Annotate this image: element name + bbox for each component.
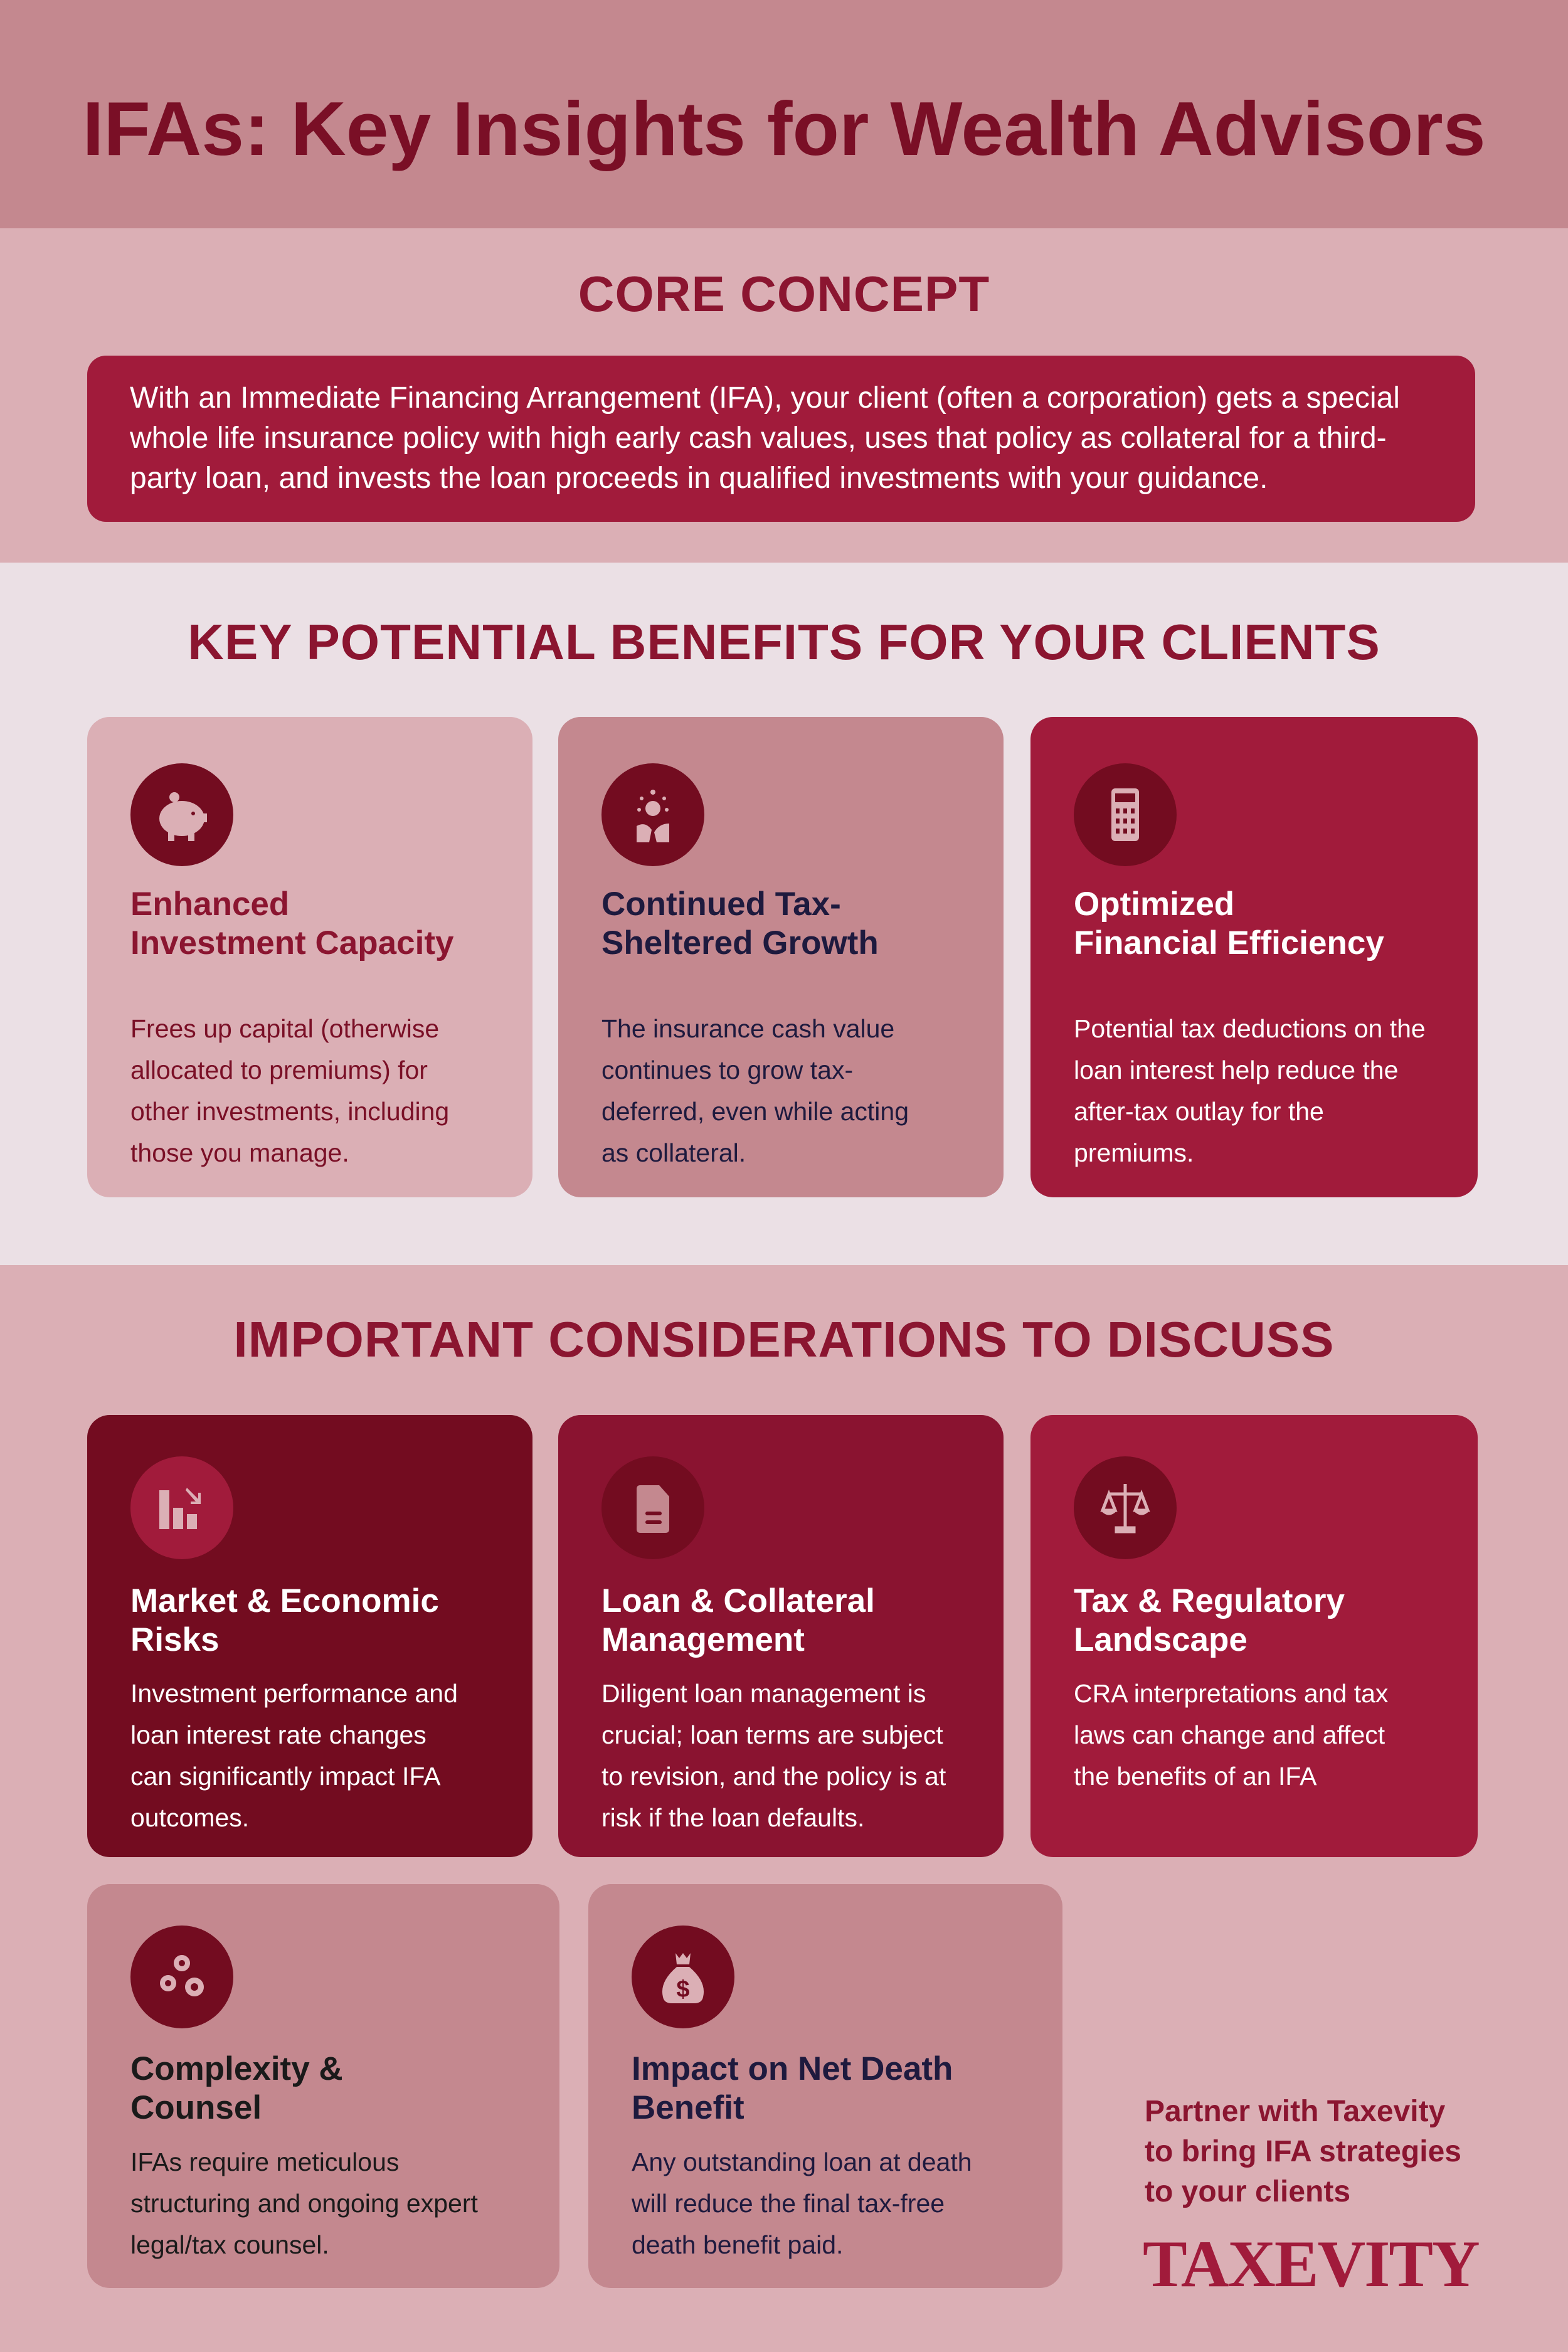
- title: [632, 2050, 953, 2126]
- body: [601, 1679, 946, 1832]
- body: other investments, including: [130, 1097, 449, 1126]
- title: Complexity &: [130, 2050, 343, 2087]
- core concept box: party loan, and invests the loan proceeds in qualified investments with your guidance.: [130, 462, 1268, 495]
- core concept box: With an Immediate Financing Arrangement (IFA), your client (often a corporation) gets a special: [130, 381, 1400, 415]
- heading: core concept: CORE CONCEPT: [578, 266, 990, 322]
- title: Impact on Net Death: [632, 2050, 953, 2087]
- section: core concept: [0, 228, 1568, 563]
- body: [130, 2148, 478, 2259]
- body: deferred, even while acting: [601, 1097, 909, 1126]
- callout: partner text: Partner with Taxevity: [1145, 2095, 1445, 2128]
- header band: [0, 0, 1568, 228]
- title: [601, 1582, 875, 1658]
- title: Investment Capacity: [130, 924, 453, 961]
- title: Counsel: [130, 2089, 262, 2126]
- body: after-tax outlay for the: [1074, 1097, 1324, 1126]
- body: those you manage.: [130, 1138, 349, 1167]
- callout: partner text: to bring IFA strategies: [1145, 2135, 1461, 2168]
- body: [130, 1014, 449, 1167]
- icon: scales: [1074, 1456, 1177, 1559]
- icon: gears: [130, 1926, 233, 2028]
- icon: calculator: [1074, 763, 1177, 866]
- body: CRA interpretations and tax: [1074, 1679, 1388, 1708]
- title: [130, 1582, 439, 1658]
- card: loan management: [558, 1415, 1004, 1857]
- body: can significantly impact IFA: [130, 1762, 440, 1791]
- body: death benefit paid.: [632, 2230, 843, 2259]
- body: laws can change and affect: [1074, 1720, 1385, 1749]
- body: [130, 1679, 458, 1832]
- heading: benefits: KEY POTENTIAL BENEFITS FOR YOUR CLIENTS: [188, 614, 1380, 670]
- body: legal/tax counsel.: [130, 2230, 329, 2259]
- body: [1074, 1014, 1426, 1167]
- title: Benefit: [632, 2089, 744, 2126]
- icon: growth plant: [601, 763, 704, 866]
- body: to revision, and the policy is at: [601, 1762, 946, 1791]
- title: Market & Economic: [130, 1582, 439, 1619]
- body: Investment performance and: [130, 1679, 458, 1708]
- title: IFAs: Key Insights for Wealth Advisors: [82, 86, 1486, 171]
- title: Management: [601, 1621, 805, 1658]
- icon: falling chart: [130, 1456, 233, 1559]
- icon: document: [601, 1456, 704, 1559]
- title: Enhanced: [130, 886, 289, 923]
- body: loan interest rate changes: [130, 1720, 426, 1749]
- body: as collateral.: [601, 1138, 746, 1167]
- title: Risks: [130, 1621, 219, 1658]
- card: enhanced investment capacity: [87, 717, 532, 1197]
- body: [601, 1014, 909, 1167]
- title: Financial Efficiency: [1074, 924, 1384, 961]
- core concept box: whole life insurance policy with high early cash values, uses that policy as collateral for a third-: [130, 421, 1387, 455]
- title: [130, 886, 454, 961]
- icon: money bag: $: [676, 1976, 690, 2003]
- body: allocated to premiums) for: [130, 1056, 428, 1084]
- title: Landscape: [1074, 1621, 1248, 1658]
- icon: money bag: [632, 1926, 734, 2028]
- body: [1074, 1679, 1388, 1791]
- card: complexity: [87, 1884, 559, 2288]
- title: [130, 2050, 343, 2126]
- body: Frees up capital (otherwise: [130, 1014, 439, 1043]
- title: [1074, 886, 1384, 961]
- section: benefits: [0, 563, 1568, 1265]
- title: Tax & Regulatory: [1074, 1582, 1345, 1619]
- core concept box: [87, 356, 1475, 522]
- section: considerations: [0, 1265, 1568, 2352]
- body: outcomes.: [130, 1803, 249, 1832]
- body: IFAs require meticulous: [130, 2148, 399, 2176]
- body: Potential tax deductions on the: [1074, 1014, 1426, 1043]
- body: continues to grow tax-: [601, 1056, 853, 1084]
- icon: piggy bank: [130, 763, 233, 866]
- body: risk if the loan defaults.: [601, 1803, 864, 1832]
- logo: TAXEVITY: TAXEVITY: [1143, 2227, 1479, 2301]
- card: death benefit: [588, 1884, 1062, 2288]
- body: Diligent loan management is: [601, 1679, 926, 1708]
- card: tax-sheltered growth: [558, 717, 1004, 1197]
- title: Sheltered Growth: [601, 924, 879, 961]
- body: The insurance cash value: [601, 1014, 894, 1043]
- body: the benefits of an IFA: [1074, 1762, 1316, 1791]
- card: market risks: [87, 1415, 532, 1857]
- body: [632, 2148, 972, 2259]
- body: structuring and ongoing expert: [130, 2189, 478, 2218]
- body: premiums.: [1074, 1138, 1194, 1167]
- body: Any outstanding loan at death: [632, 2148, 972, 2176]
- title: Continued Tax-: [601, 886, 841, 923]
- body: will reduce the final tax-free: [632, 2189, 945, 2218]
- title: Loan & Collateral: [601, 1582, 875, 1619]
- title: [601, 886, 879, 961]
- card: tax & regulatory: [1030, 1415, 1478, 1857]
- callout: partner text: to your clients: [1145, 2175, 1350, 2208]
- heading: considerations: IMPORTANT CONSIDERATIONS TO DISCUSS: [233, 1311, 1335, 1367]
- card: financial efficiency: [1030, 717, 1478, 1197]
- title: Optimized: [1074, 886, 1234, 923]
- body: loan interest help reduce the: [1074, 1056, 1398, 1084]
- body: crucial; loan terms are subject: [601, 1720, 943, 1749]
- callout: partner text: [1145, 2095, 1461, 2208]
- title: [1074, 1582, 1345, 1658]
